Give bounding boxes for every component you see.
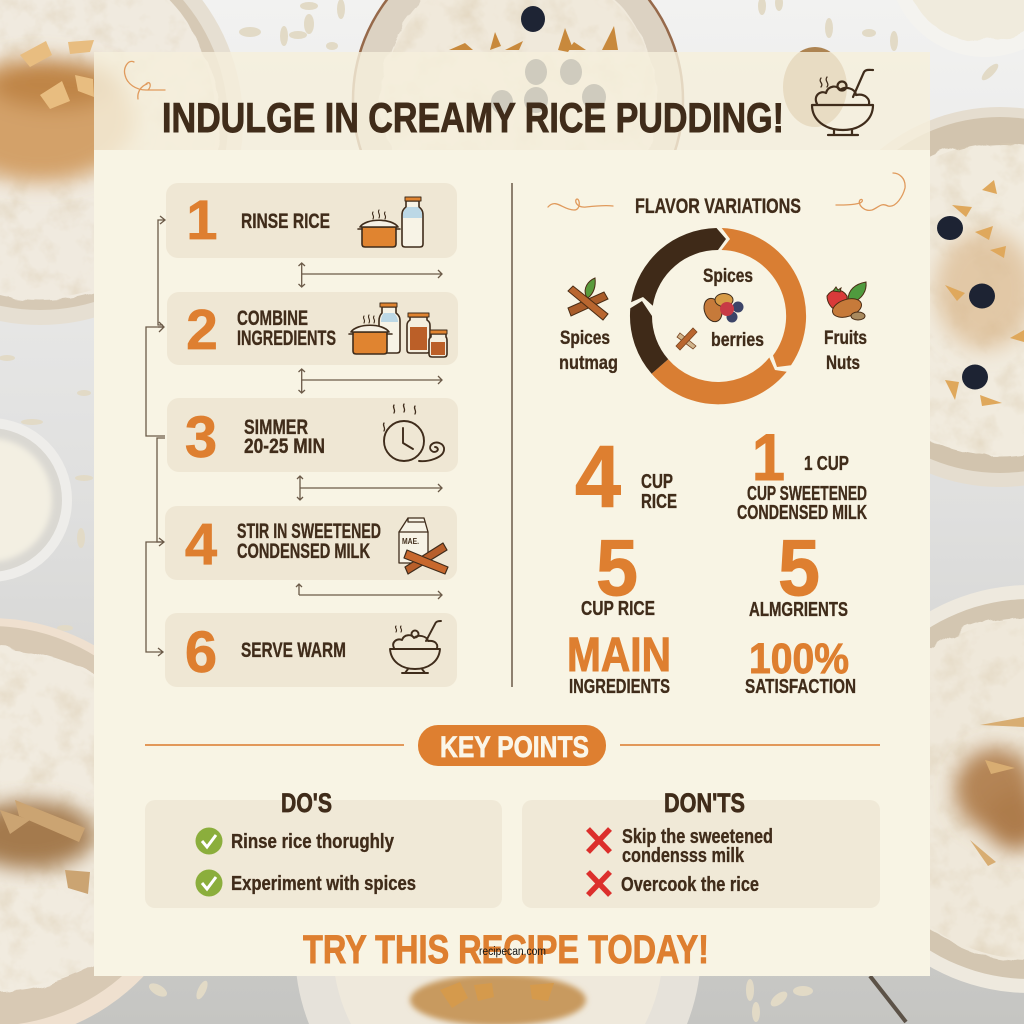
stat: 100% satisfaction: 100% — [749, 635, 849, 683]
stat: 5 cup rice: CUP RICE — [581, 598, 655, 620]
icon: nuts and berries — [701, 294, 744, 324]
step 4: 4 — [185, 512, 217, 577]
step 1: RINSE RICE — [241, 210, 330, 233]
icon: clock with steam swirl — [383, 404, 444, 461]
stat: 4 cup rice: 4 — [575, 427, 621, 526]
step 1 — [166, 183, 457, 258]
step 1: 1 — [186, 188, 218, 251]
panel: don'ts: DON'TS — [664, 788, 745, 818]
badge: key points: KEY POINTS — [440, 731, 589, 764]
between-step arrow 1 — [298, 263, 442, 287]
icon: pot, bottle and jars — [349, 303, 447, 357]
between-step arrow 3 — [297, 476, 442, 500]
step 6 — [165, 613, 457, 687]
panel: do's: DO'S — [281, 788, 332, 818]
label: spices nutmag: Spices — [560, 327, 610, 349]
icon: milk carton and cinnamon — [399, 518, 448, 574]
panel: recipe steps — [146, 183, 458, 687]
text: skip: condensss milk — [622, 845, 745, 867]
text: rinse rice: Rinse rice thorughly — [231, 831, 395, 853]
badge: key points — [418, 725, 606, 766]
text: experiment: Experiment with spices — [231, 873, 416, 895]
step 4: STIR IN SWEETENED — [237, 520, 381, 543]
icon: serving bowl — [390, 621, 441, 673]
text: skip — [622, 826, 773, 867]
panel: quantity stats — [567, 420, 867, 698]
stat: main ingredients: INGREDIENTS — [569, 676, 670, 698]
stat: main ingredients — [567, 629, 671, 698]
stat: 100% satisfaction: SATISFACTION — [745, 676, 856, 698]
stat: 1 cup sweetened condensed milk: CONDENSED MILK — [737, 502, 867, 524]
step 6: 6 — [185, 620, 217, 685]
stat: 1 cup sweetened condensed milk: 1 — [752, 420, 785, 494]
stat: 5 almgrients — [749, 523, 848, 621]
text: skip: Skip the sweetened — [622, 826, 773, 848]
stat: 4 cup rice — [575, 427, 677, 526]
label: fruits nuts: Fruits — [824, 327, 867, 349]
step 2: INGREDIENTS — [237, 327, 336, 350]
connector arrows: left bracket — [146, 216, 165, 656]
icon: milk carton and cinnamon: MAE. — [402, 537, 419, 546]
step 2 — [167, 292, 458, 365]
panel: header band — [94, 52, 930, 150]
step 4: CONDENSED MILK — [237, 540, 370, 563]
step 4 — [165, 506, 457, 580]
decorative squiggle: header — [125, 61, 165, 99]
title: INDULGE IN CREAMY RICE PUDDING! — [162, 94, 784, 141]
label: fruits nuts: Nuts — [826, 352, 860, 374]
donut chart — [630, 228, 806, 404]
step 3: 20-25 MIN — [244, 435, 325, 458]
label: berries: berries — [711, 329, 764, 351]
step 2: 2 — [186, 298, 218, 362]
watermark: recipecan.com — [479, 946, 546, 958]
between-step arrow 2 — [298, 369, 442, 393]
stat: 4 cup rice: RICE — [641, 491, 677, 513]
squiggle left — [548, 199, 613, 210]
stat: 1 cup sweetened condensed milk: CUP SWEETENED — [747, 483, 867, 505]
panel: main card body — [94, 150, 930, 976]
text: overcook: Overcook the rice — [621, 874, 759, 896]
stat: 4 cup rice: CUP — [641, 471, 673, 493]
step 3 — [167, 398, 458, 472]
step 3: SIMMER — [244, 416, 308, 439]
stat: 1 cup sweetened condensed milk: 1 CUP — [804, 453, 849, 475]
step 6: SERVE WARM — [241, 639, 346, 662]
icon: pot and milk bottle — [358, 197, 423, 247]
label: spices nutmag — [559, 327, 618, 374]
icon: check — [196, 870, 222, 896]
stat: main ingredients: MAIN — [567, 629, 671, 682]
step 3: 3 — [185, 405, 217, 470]
stat: 5 almgrients: ALMGRIENTS — [749, 599, 848, 621]
panel: do's — [145, 788, 502, 908]
icon: cinnamon with leaf — [568, 278, 608, 320]
icon: cross — [588, 829, 610, 852]
call to action: TRY THIS RECIPE TODAY! — [303, 928, 709, 972]
icon: strawberry, leaf and almond — [827, 282, 866, 321]
panel: flavor variations — [548, 173, 905, 404]
label: fruits nuts — [824, 327, 867, 374]
icon: check — [196, 828, 222, 854]
icon: cross — [588, 872, 610, 895]
stat: 1 cup sweetened condensed milk — [737, 420, 867, 524]
icon: small cinnamon — [676, 328, 697, 350]
heading: flavor variations: FLAVOR VARIATIONS — [635, 195, 801, 218]
panel: don'ts — [522, 788, 880, 908]
center divider — [511, 183, 513, 687]
stat: 5 almgrients: 5 — [778, 523, 820, 612]
between-step arrow 4 — [296, 584, 442, 599]
label: spices nutmag: nutmag — [559, 352, 618, 374]
squiggle right — [836, 173, 905, 210]
stat: 5 cup rice: 5 — [596, 523, 638, 612]
stat: 5 cup rice — [581, 523, 655, 620]
panel: key points — [145, 725, 880, 908]
label: spices center: Spices — [703, 265, 753, 287]
icon: rice bowl with spoon — [812, 70, 873, 135]
step 2: COMBINE — [237, 307, 308, 330]
